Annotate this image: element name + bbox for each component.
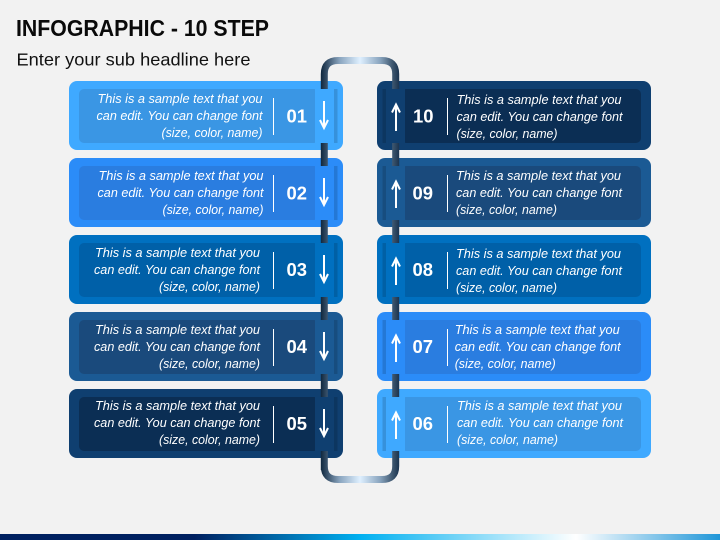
step 06 card: can edit. You can change font: [457, 415, 624, 430]
step 06 card: This is a sample text that you: [457, 398, 622, 413]
step 04 card: (size, color, name): [159, 356, 260, 371]
step 08 card: This is a sample text that you: [456, 246, 621, 261]
step 06 card: [377, 389, 651, 458]
step 09 card: can edit. You can change font: [456, 185, 623, 200]
step 01 card: 01: [286, 106, 307, 126]
step 03 card: 03: [286, 259, 307, 280]
step 04 card: can edit. You can change font: [94, 339, 261, 354]
step 06 card: (size, color, name): [457, 432, 558, 447]
step 02 card: (size, color, name): [162, 202, 264, 217]
step 02 card: This is a sample text that you: [98, 168, 264, 183]
step 03 card: This is a sample text that you: [95, 245, 260, 260]
step 05 card: [69, 389, 343, 458]
step 02 card: 02: [286, 182, 307, 204]
step 10 card: This is a sample text that you: [456, 92, 622, 107]
step 08 card: can edit. You can change font: [456, 263, 623, 278]
step 03 card: can edit. You can change font: [94, 262, 261, 277]
step 08 card: (size, color, name): [456, 280, 557, 295]
step 04 card: 04: [286, 336, 308, 357]
step 03 card: (size, color, name): [159, 279, 260, 294]
step 09 card: (size, color, name): [456, 202, 557, 217]
step 08 card: [377, 235, 651, 304]
step 01 card: This is a sample text that you: [98, 91, 262, 106]
left tabs with down arrows: [315, 89, 338, 451]
step 10 card: [377, 81, 651, 150]
step 08 card: 08: [412, 259, 433, 280]
step 07 card: 07: [412, 336, 433, 357]
step 04 card: This is a sample text that you: [95, 322, 260, 337]
step 07 card: [377, 312, 651, 381]
step 05 card: 05: [286, 413, 307, 434]
step 10 card: (size, color, name): [456, 126, 558, 141]
sub headline: Enter your sub headline here: [16, 50, 250, 70]
step 05 card: can edit. You can change font: [94, 415, 261, 430]
step 04 card: [69, 312, 343, 381]
step 10 card: 10: [413, 106, 434, 126]
step 07 card: can edit. You can change font: [455, 339, 622, 354]
step 10 card: can edit. You can change font: [456, 109, 624, 124]
step 06 card: 06: [412, 413, 433, 434]
right tabs with up arrows: [382, 89, 405, 451]
step 02 card: [69, 158, 343, 227]
connecting tube: [324, 60, 396, 480]
step 07 card: This is a sample text that you: [455, 322, 620, 337]
step 01 card: (size, color, name): [162, 125, 262, 140]
step 09 card: 09: [412, 182, 433, 204]
step 05 card: This is a sample text that you: [95, 398, 260, 413]
step 09 card: This is a sample text that you: [456, 168, 621, 183]
bottom gradient bar: [0, 534, 720, 540]
step 09 card: [377, 158, 651, 227]
step 01 card: [69, 81, 343, 150]
step 01 card: can edit. You can change font: [96, 108, 264, 123]
step 07 card: (size, color, name): [455, 356, 556, 371]
step 02 card: can edit. You can change font: [98, 185, 265, 200]
step 03 card: [69, 235, 343, 304]
step 05 card: (size, color, name): [159, 432, 260, 447]
title: INFOGRAPHIC - 10 STEP: [16, 15, 269, 41]
